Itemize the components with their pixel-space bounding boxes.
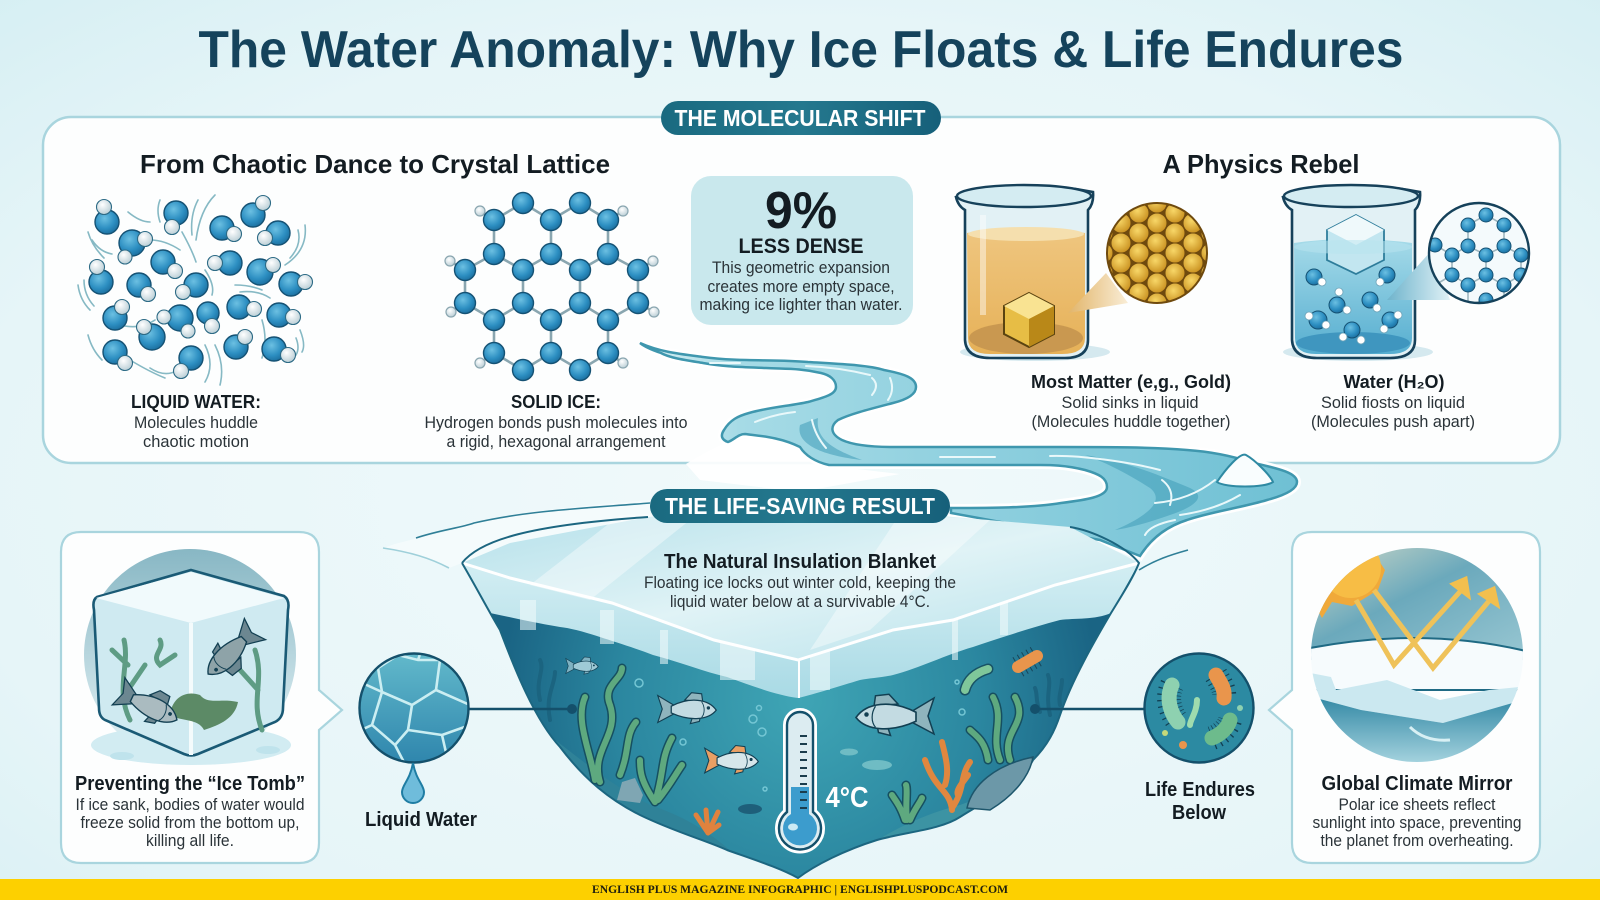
text: natural insulation blanket	[644, 551, 956, 611]
section badge: the life-saving result: THE LIFE-SAVING RESULT	[665, 493, 935, 519]
label: liquid water: Liquid Water	[365, 809, 477, 831]
heading: a physics rebel: A Physics Rebel	[1162, 149, 1360, 179]
callout: 9% less dense: making ice lighter than water.	[700, 296, 902, 314]
icon: liquid water magnifier with drop	[358, 652, 577, 804]
caption: water: Solid fiosts on liquid	[1321, 393, 1465, 412]
icon: fish left group	[566, 657, 762, 814]
text: ice tomb: Preventing the “Ice Tomb”	[75, 773, 305, 795]
caption: most matter: Solid sinks in liquid	[1062, 393, 1198, 412]
caption: most matter: Most Matter (e,g., Gold)	[1031, 371, 1231, 392]
text: climate mirror	[1312, 773, 1522, 850]
heading: from chaotic dance to crystal lattice: From Chaotic Dance to Crystal Lattice	[140, 149, 610, 179]
callout: 9% less dense: 9%	[765, 182, 837, 240]
icon: seaweed and coral left	[582, 668, 719, 833]
text: ice tomb: killing all life.	[146, 831, 234, 850]
icon: gold beaker with magnifier	[956, 185, 1207, 361]
text: ice tomb: If ice sank, bodies of water would	[76, 795, 304, 814]
caption: liquid water: chaotic motion	[143, 432, 249, 451]
text: natural insulation blanket: The Natural Insulation Blanket	[664, 551, 936, 573]
caption: water: (Molecules push apart)	[1311, 412, 1475, 431]
callout: 9% less dense	[691, 176, 913, 325]
caption: liquid water: LIQUID WATER:	[131, 392, 261, 412]
callout: 9% less dense: LESS DENSE	[738, 235, 864, 258]
text: natural insulation blanket: liquid water below at a survivable 4°C.	[670, 592, 930, 611]
panel: preventing the ice tomb	[61, 532, 342, 863]
icon: microbes magnifier	[1030, 654, 1254, 762]
illustration: left ice shelf	[383, 500, 650, 568]
icon: bubbles	[635, 679, 965, 791]
text: climate mirror: the planet from overheating.	[1320, 831, 1514, 850]
diagram: liquid water molecules	[78, 195, 312, 385]
caption: liquid water	[131, 392, 261, 451]
callout: 9% less dense: creates more empty space,	[708, 278, 894, 296]
caption: most matter	[1031, 371, 1231, 431]
footer banner	[0, 879, 1600, 900]
panel: global climate mirror	[1269, 532, 1540, 863]
text: ice tomb	[75, 773, 305, 850]
icon: water beaker with magnifier	[1283, 185, 1529, 361]
icon: plankton in water	[965, 656, 1037, 690]
caption: liquid water: Molecules huddle	[134, 413, 258, 432]
label: life endures below: Below	[1172, 802, 1226, 824]
icon: fish right and pale fish	[840, 694, 934, 770]
text: natural insulation blanket: Floating ice locks out winter cold, keeping the	[644, 573, 956, 592]
panel: the molecular shift	[43, 117, 1560, 463]
caption: solid ice: a rigid, hexagonal arrangement	[446, 432, 666, 451]
diagram: solid ice hexagonal lattice	[445, 192, 659, 380]
text: climate mirror: Global Climate Mirror	[1322, 773, 1513, 795]
icon: ice cube with trapped fish	[84, 549, 296, 765]
icon: polar ice reflecting sunlight	[1311, 548, 1523, 762]
callout: 9% less dense: This geometric expansion	[712, 259, 890, 277]
caption: solid ice: Hydrogen bonds push molecules into	[424, 413, 688, 432]
label: life endures below	[1145, 779, 1255, 824]
footer banner: ENGLISH PLUS MAGAZINE INFOGRAPHIC | ENGLISHPLUSPODCAST.COM	[592, 882, 1008, 896]
caption: most matter: (Molecules huddle together)	[1032, 412, 1230, 431]
caption: solid ice	[424, 392, 688, 451]
caption: water	[1311, 371, 1475, 431]
text: climate mirror: sunlight into space, preventing	[1312, 813, 1522, 832]
section badge: the molecular shift: THE MOLECULAR SHIFT	[674, 105, 926, 131]
icon: thermometer at 4°C	[779, 712, 821, 849]
text: ice tomb: freeze solid from the bottom up,	[80, 813, 300, 832]
caption: solid ice: SOLID ICE:	[511, 392, 601, 412]
illustration: river of meltwater	[640, 343, 1297, 556]
caption: water: Water (H₂O)	[1344, 371, 1444, 392]
title: The Water Anomaly: Why Ice Floats & Life Endures	[198, 21, 1404, 79]
icon: seaweed coral and rock right	[892, 697, 1033, 820]
label: life endures below: Life Endures	[1145, 779, 1255, 801]
text: climate mirror: Polar ice sheets reflect	[1338, 795, 1496, 814]
label: 4°C: 4°C	[826, 782, 869, 814]
illustration: iceberg with underwater scene	[462, 512, 1188, 880]
